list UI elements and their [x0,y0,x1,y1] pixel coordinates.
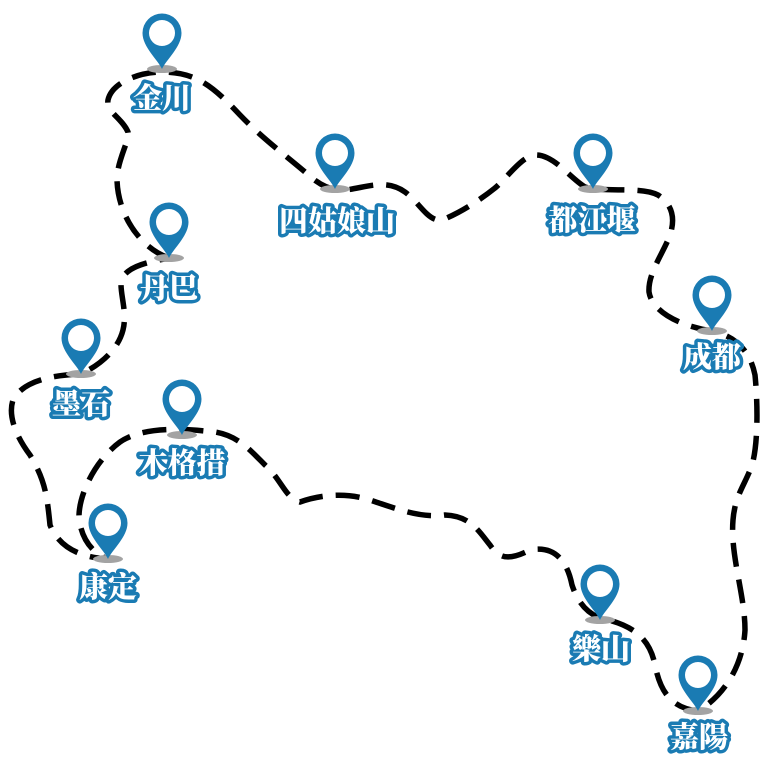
pin: 丹巴 [150,202,188,262]
pin: 樂山 [580,564,620,624]
label: 都江堰: 都江堰 [548,204,636,237]
label: 四姑娘山: 四姑娘山 [279,205,395,238]
label: 墨石: 墨石 [52,388,110,421]
pin: 四姑娘山 [316,134,354,193]
pin: 成都 [692,276,732,335]
pin: 康定 [88,504,128,563]
label: 木格措: 木格措 [138,447,226,480]
label: 樂山: 樂山 [572,632,630,666]
pin: 都江堰 [574,134,612,193]
pin: 墨石 [62,318,100,378]
pin: 金川 [142,14,182,73]
label: 嘉陽: 嘉陽 [670,720,728,754]
pin: 嘉陽 [678,656,718,715]
label: 成都: 成都 [683,341,741,374]
label: 金川: 金川 [133,82,191,115]
label: 丹巴: 丹巴 [140,272,198,305]
pin: 木格措 [162,380,202,439]
label: 康定: 康定 [79,570,137,604]
